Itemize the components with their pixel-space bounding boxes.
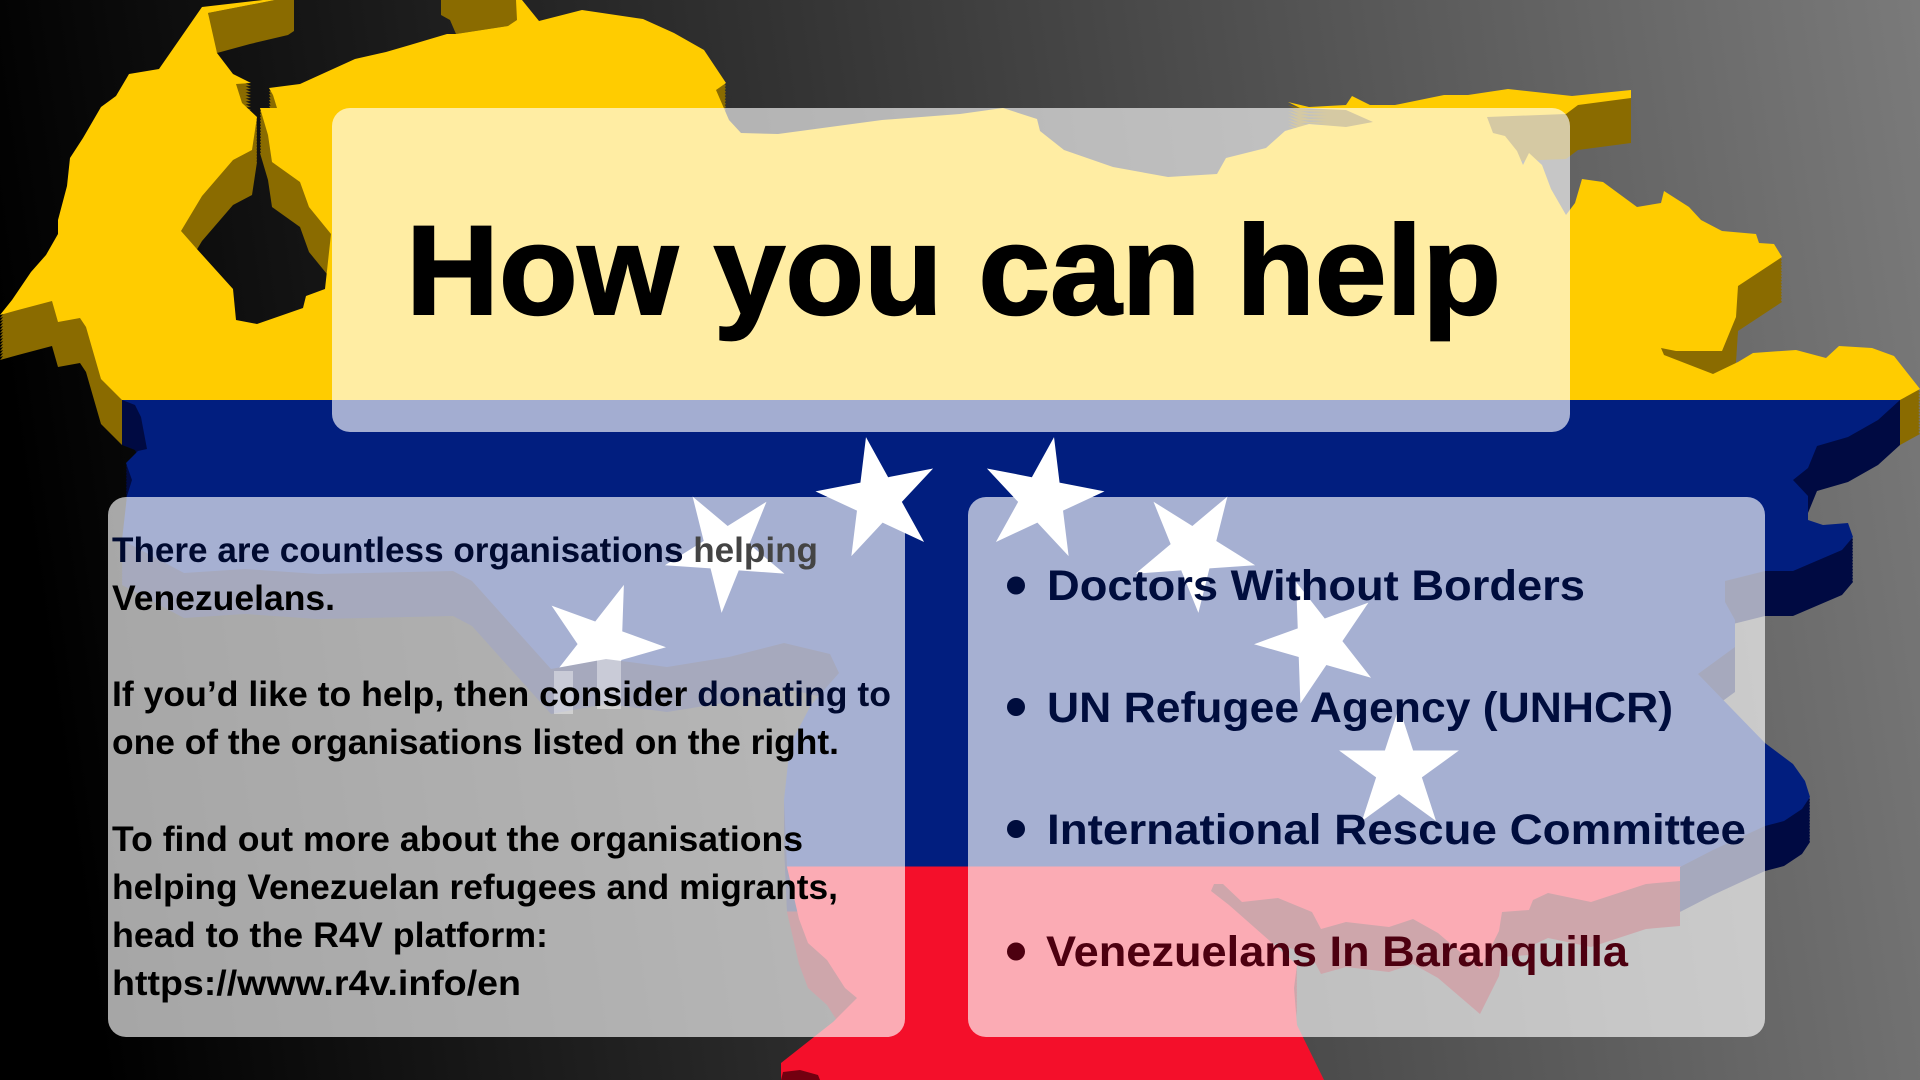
- list item: Venezuelans In Baranquilla: Venezuelans In Baranquilla: [1046, 928, 1629, 976]
- paragraph: consider donating: [112, 675, 891, 762]
- paragraph: R4V platform: To find out more about the organisations: [112, 820, 803, 859]
- Paraguana peninsula shadow: [441, 0, 520, 34]
- list item: UNHCR: UN Refugee Agency (UNHCR): [1047, 684, 1673, 732]
- heading: How you can help: [406, 199, 1501, 341]
- dark red side wall correction: [1100, 866, 1680, 912]
- panel: intro text: [108, 497, 905, 1037]
- flag stars: [514, 426, 1459, 821]
- paragraph: countless organisations: There are countless organisations helping: [112, 531, 818, 570]
- Guajira peninsula shadow: [208, 0, 294, 53]
- paragraph: consider donating: If you’d like to help, then consider donating to: [112, 675, 891, 714]
- paragraph: consider donating: one of the organisations listed on the right.: [112, 723, 839, 762]
- paragraph: R4V platform: [112, 820, 838, 1003]
- panel: organisations list: [968, 497, 1765, 1037]
- panel: title: [332, 108, 1570, 432]
- paragraph: countless organisations: Venezuelans.: [112, 579, 335, 618]
- paragraph: R4V platform: head to the R4V platform:: [112, 916, 548, 955]
- list item: Doctors Without Borders: Doctors Without Borders: [1047, 562, 1585, 610]
- paragraph: R4V platform: https://www.r4v.info/en: [112, 964, 521, 1003]
- dark red detail at bottom edge: [781, 1070, 820, 1080]
- paragraph: countless organisations: [112, 531, 818, 618]
- list item: International Rescue Committee: International Rescue Committee: [1047, 806, 1746, 854]
- faded star remnants on map edge: [554, 659, 621, 714]
- dark blue side wall correction: [122, 400, 1900, 445]
- paragraph: R4V platform: helping Venezuelan refugees and migrants,: [112, 868, 838, 907]
